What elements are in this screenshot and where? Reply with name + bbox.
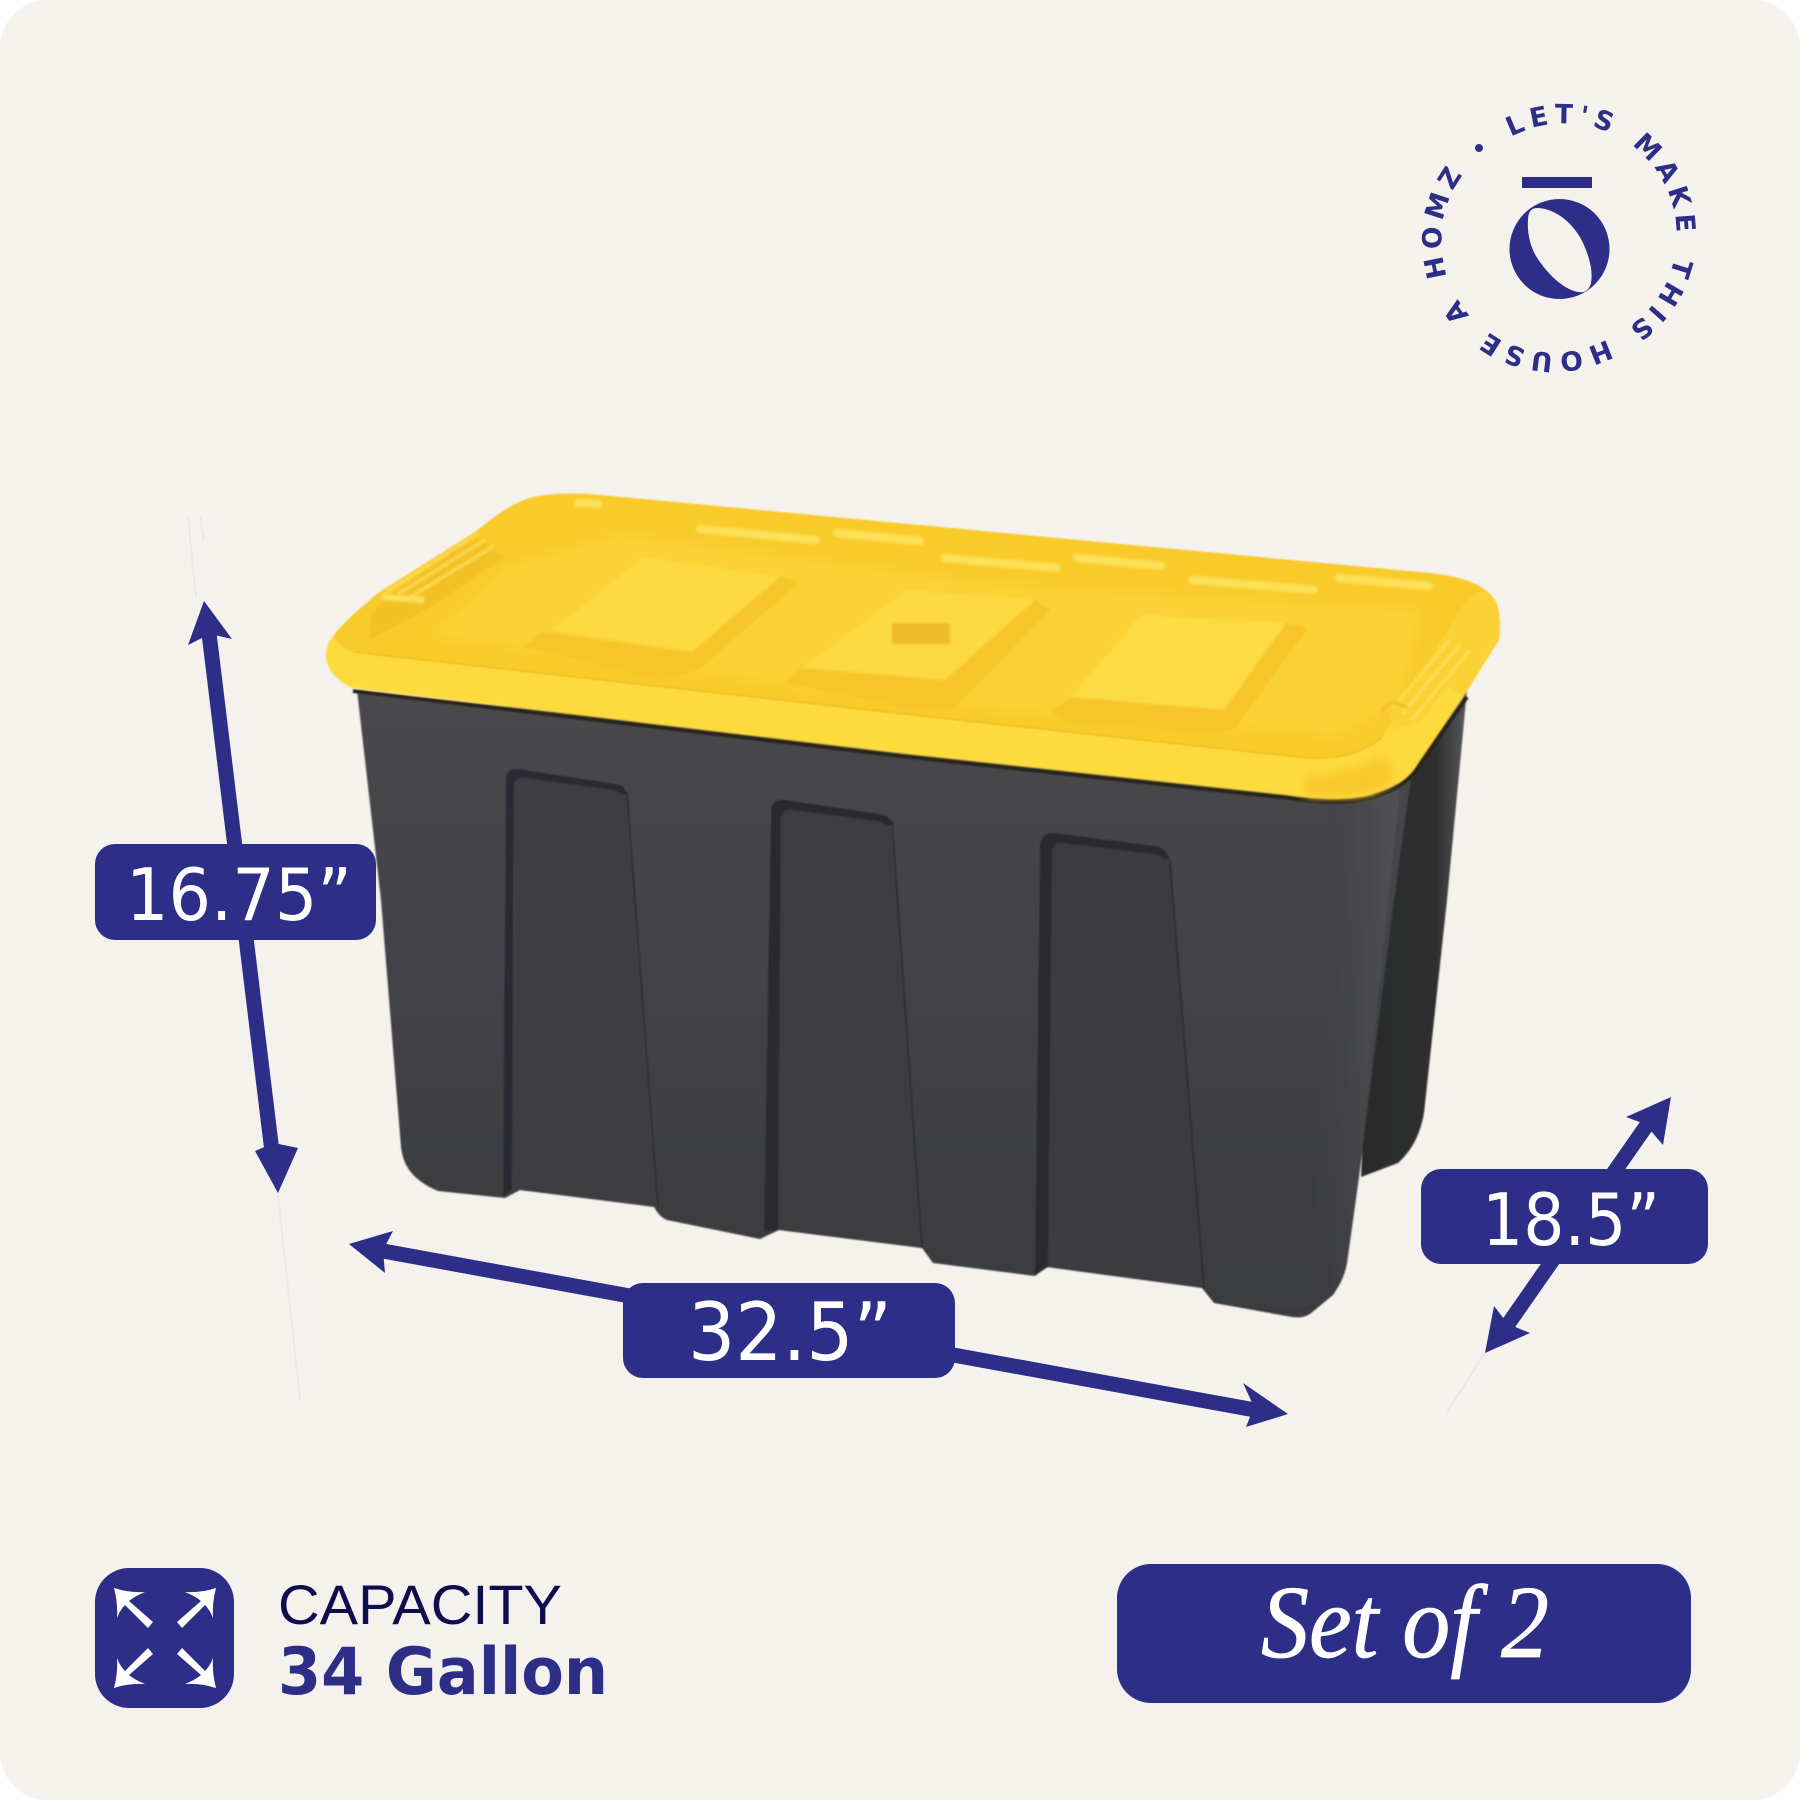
width label	[623, 1283, 955, 1379]
left handle	[369, 534, 504, 640]
lid recess 3	[1051, 615, 1308, 733]
capacity icon	[95, 1568, 234, 1708]
depth arrow 18.5	[1485, 1097, 1671, 1353]
set of 2 badge: Set of 2	[1261, 1565, 1549, 1680]
capacity value: 34 Gallon	[278, 1635, 608, 1710]
lid rim corner shade	[1305, 755, 1395, 797]
recessed panel 3	[1035, 833, 1204, 1288]
lid emblem	[892, 623, 950, 644]
right handle	[1382, 633, 1475, 730]
tote front wall	[357, 690, 1412, 1317]
capacity label: CAPACITY	[278, 1573, 562, 1636]
width label: 32.5”	[688, 1286, 892, 1379]
brand logo badge	[1422, 104, 1696, 372]
height label: 16.75”	[126, 853, 352, 937]
lid moulded details	[369, 503, 1475, 733]
lid rim edge line	[353, 652, 1382, 758]
height arrow 16.75	[188, 601, 298, 1193]
logo mark: circle with bar	[1510, 177, 1610, 299]
lid outline	[326, 494, 1500, 799]
slogan separator dot	[1475, 144, 1483, 152]
tote front right corner highlight	[1300, 790, 1400, 1310]
back slats	[578, 503, 1429, 590]
lid front rim	[326, 636, 1463, 799]
storage tote product	[326, 494, 1500, 1317]
lid interior light area	[430, 535, 1420, 735]
circular slogan text: LET'S MAKE THIS HOUSE A HOMZ	[1422, 104, 1696, 372]
lid right inner rim	[1382, 592, 1499, 763]
depth label	[1421, 1169, 1708, 1264]
faint ghost guide lines	[188, 516, 1485, 1412]
width arrow 32.5	[349, 1231, 1288, 1427]
lid recess 2	[784, 590, 1051, 710]
depth label: 18.5”	[1482, 1178, 1660, 1262]
recessed panel 1	[503, 769, 658, 1207]
yellow lid	[326, 494, 1500, 799]
shadow below lid	[353, 691, 1467, 802]
tote side wall	[1361, 690, 1467, 1177]
recessed panel 2	[764, 800, 922, 1248]
lid recess 1	[524, 557, 800, 680]
set of 2 badge	[1117, 1564, 1691, 1703]
